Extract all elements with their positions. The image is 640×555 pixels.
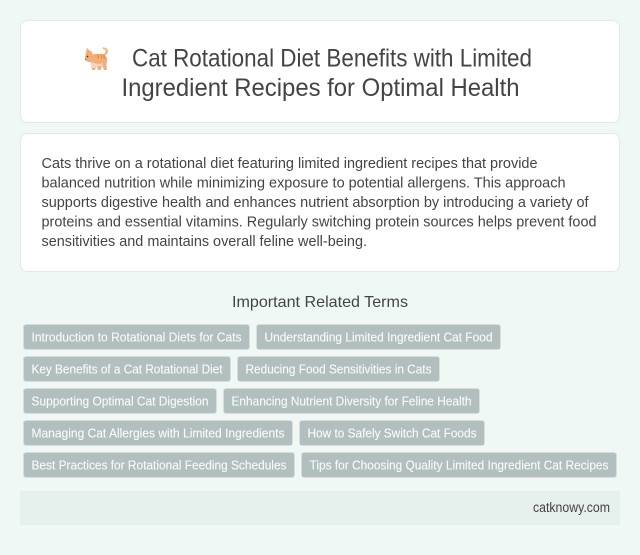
footer [20, 491, 620, 525]
tag [302, 452, 616, 478]
tag: Introduction to Rotational Diets for Cats [32, 330, 242, 344]
tag [24, 388, 216, 414]
description text: balanced nutrition while minimizing exposure to potential allergens. This approach [42, 176, 566, 192]
tag [24, 420, 292, 446]
tag [24, 356, 230, 382]
tag [24, 452, 294, 478]
tag: How to Safely Switch Cat Foods [308, 426, 476, 440]
description text: sensitivities and maintains overall feline well-being. [42, 234, 367, 250]
tag: Tips for Choosing Quality Limited Ingredient Cat Recipes [310, 458, 608, 472]
title text: Cat Rotational Diet Benefits with Limited [132, 44, 532, 72]
panel: description card [20, 134, 620, 272]
tag [300, 420, 484, 446]
tag: Managing Cat Allergies with Limited Ingredients [32, 426, 284, 440]
tag [256, 324, 500, 350]
tag [224, 388, 480, 414]
tag [238, 356, 440, 382]
footer source text: catknowy.com [533, 500, 610, 515]
tag: Supporting Optimal Cat Digestion [32, 394, 209, 408]
tag [24, 324, 250, 350]
tag: Enhancing Nutrient Diversity for Feline Health [232, 394, 472, 408]
panel: related term tags [24, 324, 616, 478]
tag: Understanding Limited Ingredient Cat Food [264, 330, 493, 344]
description text: proteins and essential vitamins. Regularly switching protein sources helps prevent food [42, 214, 596, 230]
icon: cat [85, 47, 108, 70]
tag: Best Practices for Rotational Feeding Schedules [32, 458, 286, 472]
description text: Cats thrive on a rotational diet featuring limited ingredient recipes that provide [42, 156, 538, 172]
panel: title card [20, 20, 620, 122]
description text: supports digestive health and enhances nutrient absorption by introducing a variety of [42, 195, 589, 211]
tag: Reducing Food Sensitivities in Cats [246, 362, 432, 376]
tag: Key Benefits of a Cat Rotational Diet [32, 362, 223, 376]
title text: Ingredient Recipes for Optimal Health [122, 74, 520, 102]
heading: important related terms: Important Related Terms [232, 294, 408, 311]
